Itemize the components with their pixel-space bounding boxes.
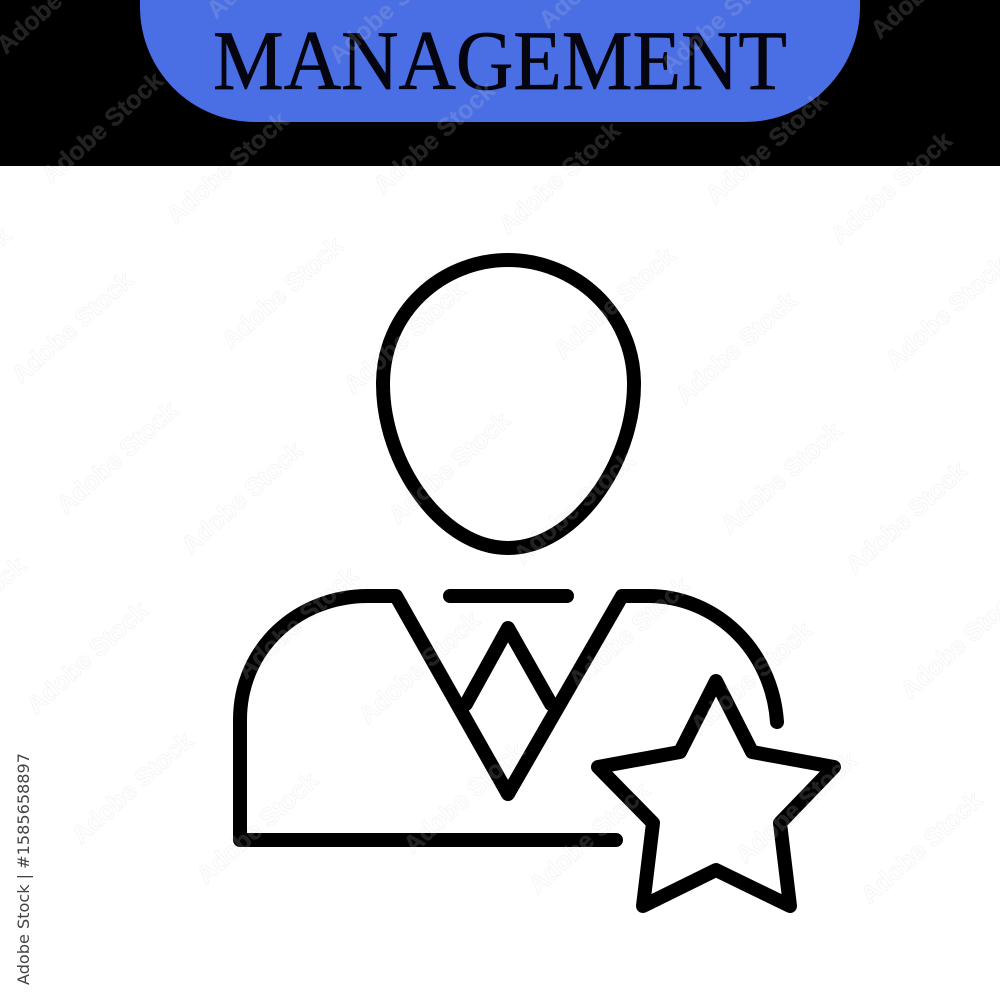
watermark pattern: Adobe Stock: [21, 596, 154, 719]
watermark pattern: Adobe Stock: [216, 231, 349, 354]
watermark pattern: Adobe Stock: [338, 276, 471, 399]
header bar: [0, 0, 1000, 166]
watermark pattern: Adobe Stock: [51, 396, 184, 519]
watermark pattern: Adobe Stock: [176, 436, 309, 559]
watermark pattern: Adobe Stock: [523, 776, 656, 899]
icon: suit body: [240, 596, 777, 840]
title: MANAGEMENT: [213, 14, 787, 108]
watermark pattern: Adobe Stock: [700, 86, 833, 209]
watermark pattern: Adobe Stock: [231, 561, 364, 684]
watermark pattern: Adobe Stock: [368, 76, 501, 199]
watermark pattern: Adobe Stock: [36, 66, 169, 189]
watermark pattern: Adobe Stock: [161, 106, 294, 229]
stock id text: Adobe Stock | #1585658897: [14, 753, 33, 985]
watermark pattern: Adobe Stock: [730, 746, 863, 869]
watermark pattern: Adobe Stock: [383, 406, 516, 529]
icon: tie: [466, 628, 551, 704]
icon: collar line: [450, 589, 567, 603]
watermark pattern: Adobe Stock: [840, 456, 973, 579]
icon: star: [598, 681, 834, 906]
watermark pattern: Adobe Stock: [66, 726, 199, 849]
header pill: [140, 0, 860, 122]
watermark pattern: Adobe Stock: [855, 786, 988, 909]
watermark pattern: Adobe Stock: [493, 116, 626, 239]
watermark pattern: Adobe Stock: [548, 241, 681, 364]
watermark pattern: Adobe Stock: [191, 766, 324, 889]
watermark pattern: Adobe Stock: [825, 126, 958, 249]
watermark pattern: Adobe Stock: [6, 266, 139, 389]
watermark pattern: Adobe Stock: [508, 446, 641, 569]
watermark pattern: Adobe Stock: [685, 616, 818, 739]
icon: head: [383, 260, 634, 548]
watermark pattern: Adobe Stock: [353, 606, 486, 729]
watermark pattern: Adobe Stock: [563, 571, 696, 694]
watermark pattern: Adobe Stock: [398, 736, 531, 859]
watermark pattern: Adobe Stock: [670, 286, 803, 409]
watermark pattern: Adobe Stock: [715, 416, 848, 539]
